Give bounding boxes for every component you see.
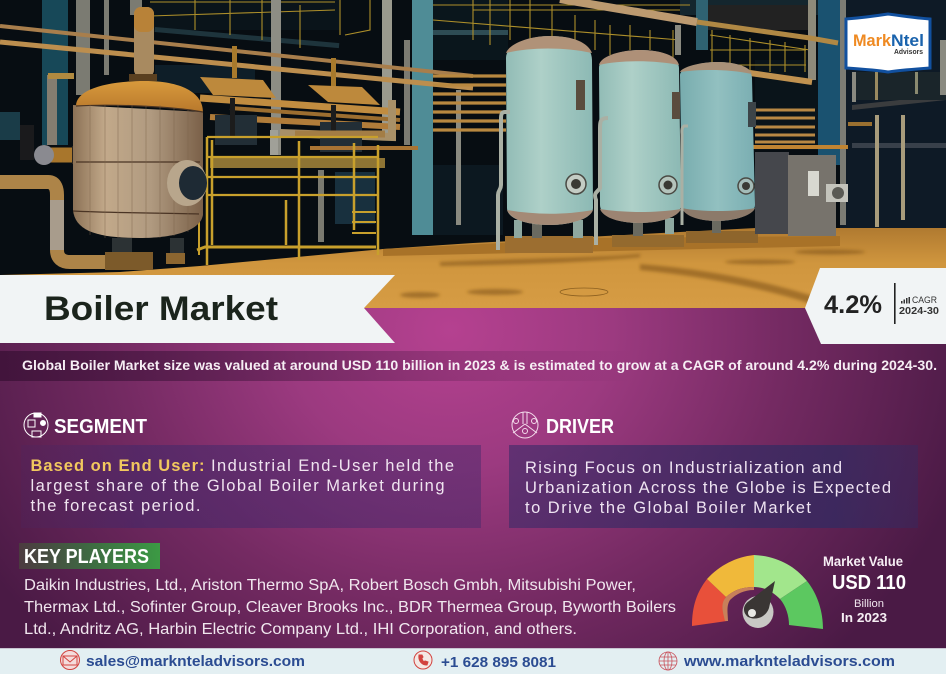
summary text: Global Boiler Market size was valued at around USD 110 billion in 2023 & is estimated to grow at a CAGR of around 4.2% during 2024-30. — [22, 358, 937, 373]
gauge chart — [692, 555, 823, 629]
grey utility building — [755, 152, 848, 236]
yellow upper railings — [150, 0, 810, 72]
CAGR period: 2024-30 — [899, 305, 939, 317]
gauge: light green segment — [754, 555, 807, 599]
CAGR badge — [805, 268, 946, 344]
key players list — [24, 577, 676, 638]
gauge: yellow segment — [707, 555, 754, 597]
photo: industrial boiler plant — [0, 0, 946, 308]
key players list: Thermax Ltd., Sofinter Group, Cleaver Brooks Inc., BDR Thermea Group, Byworth Boilers — [24, 599, 676, 616]
website: www.marknteladvisors.com — [683, 654, 895, 670]
title: Boiler Market — [44, 290, 278, 328]
long horizontal pipes — [0, 0, 872, 147]
market value: Billion — [854, 598, 884, 610]
floor — [0, 228, 946, 308]
heading: segment: SEGMENT — [54, 416, 147, 438]
email: sales@marknteladvisors.com — [86, 654, 305, 670]
heading: key players: KEY PLAYERS — [24, 546, 149, 568]
panel: driver: Rising Focus on Industrialization and — [525, 459, 842, 477]
icon: segment — [24, 413, 48, 437]
logo: MarkNtel Advisors: Advisors — [894, 49, 923, 56]
panel: driver: to Drive the Global Boiler Market — [525, 499, 811, 517]
boiler tank — [73, 7, 207, 270]
blue storage tanks — [498, 36, 758, 253]
heading: driver: DRIVER — [546, 416, 614, 438]
key players list: Ltd., Andritz AG, Harbin Electric Company Ltd., IHI Corporation, and others. — [24, 621, 577, 638]
gauge: needle — [744, 581, 775, 619]
logo: MarkNtel Advisors: Ntel — [891, 31, 924, 50]
CAGR value: 4.2% — [824, 291, 882, 319]
left pipework — [0, 75, 130, 262]
market value — [823, 554, 906, 625]
gantry and instruments — [200, 46, 418, 242]
upper level background structure — [0, 0, 946, 235]
market value: In 2023 — [841, 610, 887, 625]
yellow railing — [197, 137, 378, 265]
grey vertical pipes — [76, 0, 846, 225]
gauge: red segment — [692, 579, 727, 626]
panel: driver: Urbanization Across the Globe is Expected — [525, 479, 891, 497]
gauge: green segment — [780, 581, 823, 629]
phone: +1 628 895 8081 — [441, 655, 556, 671]
panel: segment: Industrial End-User held the — [211, 457, 454, 475]
logo: MarkNtel Advisors: Mark — [853, 31, 892, 50]
summary band — [0, 351, 633, 381]
panel: segment — [21, 445, 481, 528]
icon: globe — [659, 652, 677, 670]
right side dark structure — [852, 40, 946, 227]
title banner — [0, 275, 395, 343]
gauge: inner shade — [722, 587, 754, 621]
panel: driver — [509, 445, 918, 528]
gauge: hub — [742, 596, 774, 628]
icon: email — [60, 650, 80, 670]
CAGR label: CAGR — [912, 295, 937, 306]
key players list: Daikin Industries, Ltd., Ariston Thermo SpA, Robert Bosch Gmbh, Mitsubishi Power, — [24, 577, 636, 594]
icon: small bar chart — [901, 297, 910, 304]
market value: Market Value — [823, 554, 903, 569]
icon: phone — [414, 651, 432, 669]
blue columns — [42, 0, 842, 235]
panel: segment: Based on End User: — [30, 457, 204, 475]
contact footer — [0, 648, 946, 674]
panel: segment: the forecast period. — [30, 497, 200, 515]
logo: MarkNtel Advisors — [846, 14, 930, 72]
panel: segment: largest share of the Global Boiler Market during — [30, 477, 445, 495]
icon: driver — [512, 412, 538, 438]
market value: USD 110 — [832, 571, 906, 594]
